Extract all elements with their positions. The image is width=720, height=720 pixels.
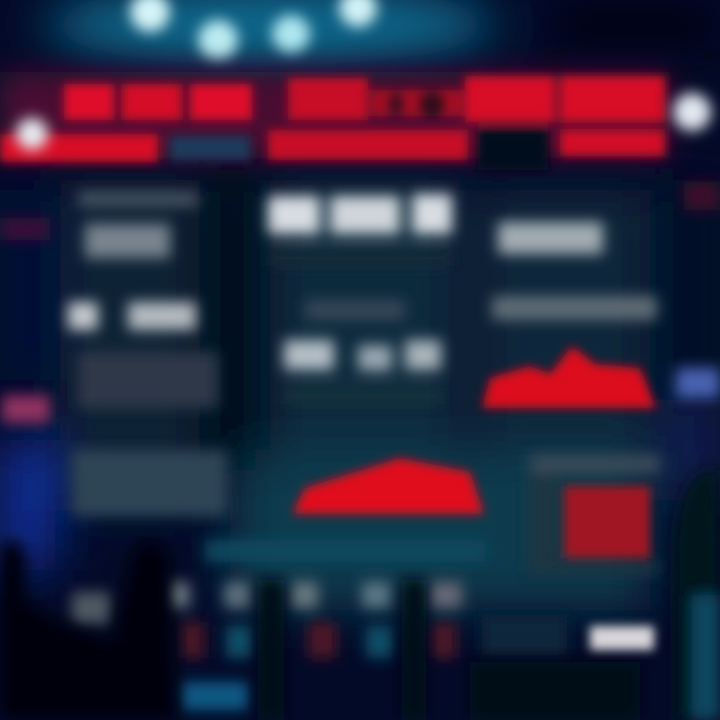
red chart centre <box>292 458 484 514</box>
left column text blocks <box>68 192 227 516</box>
red chart right <box>482 346 656 408</box>
audience silhouettes <box>0 470 720 720</box>
centre heading and stat <box>268 194 452 404</box>
red box panel <box>528 455 660 574</box>
title banner <box>0 72 711 170</box>
right column stat <box>492 222 657 320</box>
small white label <box>590 626 654 650</box>
left and right side accents <box>0 182 720 423</box>
lower row of columns <box>72 540 567 710</box>
top stage lights <box>45 0 720 65</box>
